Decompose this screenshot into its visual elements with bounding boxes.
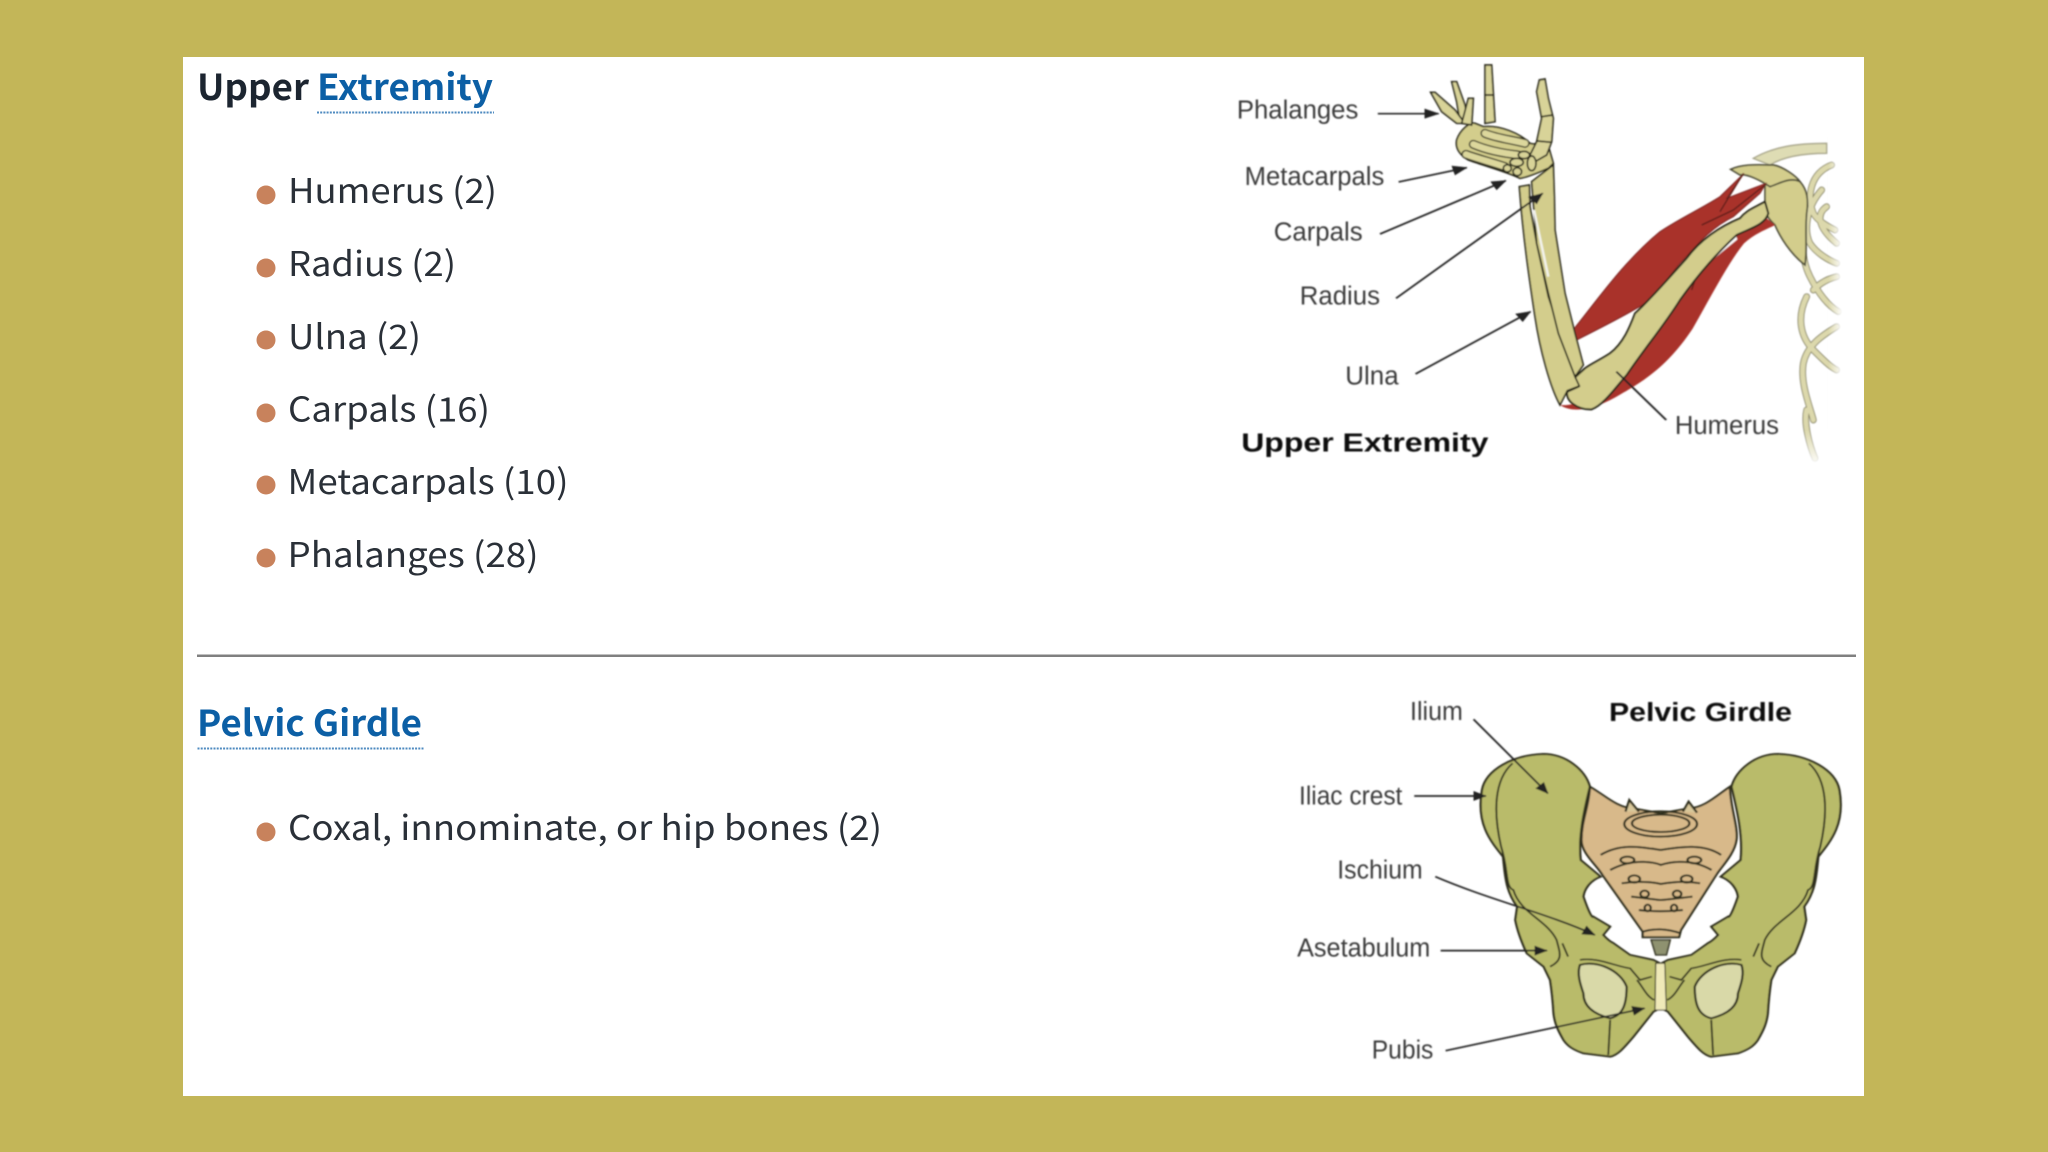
arm anatomy xyxy=(1519,137,1843,467)
list: upper extremity bones: Phalanges (28) xyxy=(288,528,538,577)
metacarpal tubes xyxy=(1466,133,1525,167)
arrows and labels: arm: Humerus xyxy=(1675,412,1779,440)
left hip bone xyxy=(1481,754,1660,1057)
sacrum details xyxy=(1601,800,1721,933)
list: pelvic bones: Coxal, innominate, or hip bones (2) xyxy=(288,801,882,850)
clavicle xyxy=(1753,143,1827,165)
interosseous slit xyxy=(1534,210,1548,277)
thumb xyxy=(1530,79,1553,162)
heading: Upper Extremity: Upper xyxy=(197,59,309,111)
hand xyxy=(1431,65,1553,178)
ribs xyxy=(1801,165,1838,458)
illustration: pelvic girdle: Pubis xyxy=(1372,1035,1433,1064)
arrows and labels: arm: Carpals xyxy=(1274,218,1363,247)
illustration: pelvic girdle: Asetabulum xyxy=(1297,933,1430,962)
labels: Ilium xyxy=(1410,697,1463,726)
pubic symphysis xyxy=(1655,963,1666,1010)
list: upper extremity bones: Carpals (16) xyxy=(288,382,490,432)
arrows and labels: arm: Upper Extremity xyxy=(1241,429,1489,458)
coccyx xyxy=(1651,940,1670,955)
illustration: pelvic girdle: Ischium xyxy=(1337,855,1423,884)
list: upper extremity bones: Metacarpals (10) xyxy=(288,455,568,504)
arrows and labels: arm: Ulna xyxy=(1345,362,1399,390)
heading: Upper Extremity xyxy=(197,59,494,112)
heading: Pelvic Girdle: Pelvic Girdle xyxy=(197,695,422,747)
palm xyxy=(1456,123,1553,178)
radius xyxy=(1532,165,1583,377)
muscle tendon details xyxy=(1692,173,1765,290)
heading: Upper Extremity: Extremity xyxy=(317,59,493,111)
panel: white card xyxy=(183,57,1864,1096)
humerus xyxy=(1567,202,1768,409)
fade to white at the right xyxy=(1828,137,1842,467)
illustration: pelvic girdle xyxy=(1297,697,1841,1064)
list: upper extremity bones xyxy=(256,164,568,577)
fingers xyxy=(1485,65,1495,123)
carpals xyxy=(1503,151,1536,176)
white gap by humerus xyxy=(1712,236,1737,261)
biceps muscle xyxy=(1570,173,1766,343)
arrows and labels: arm: Phalanges xyxy=(1237,96,1358,124)
illustration: pelvic girdle: Pelvic Girdle xyxy=(1609,698,1792,727)
arrows and labels: arm: Radius xyxy=(1300,282,1380,310)
arrows and labels: arm: Metacarpals xyxy=(1245,163,1384,191)
illustration: pelvic girdle: Iliac crest xyxy=(1299,781,1403,810)
right hip bone xyxy=(1661,754,1841,1057)
scapula xyxy=(1765,178,1808,265)
list: upper extremity bones: Humerus (2) xyxy=(288,164,497,213)
divider xyxy=(197,654,1856,657)
arrows and labels: arm xyxy=(1237,96,1779,458)
illustration: upper extremity skeleton xyxy=(1237,65,1843,467)
arrows xyxy=(1414,719,1645,1051)
list: upper extremity bones: Ulna (2) xyxy=(288,310,421,359)
sacrum xyxy=(1581,787,1737,937)
ulna xyxy=(1519,185,1579,405)
list: upper extremity bones: Radius (2) xyxy=(288,237,456,286)
triceps muscle xyxy=(1560,218,1775,410)
